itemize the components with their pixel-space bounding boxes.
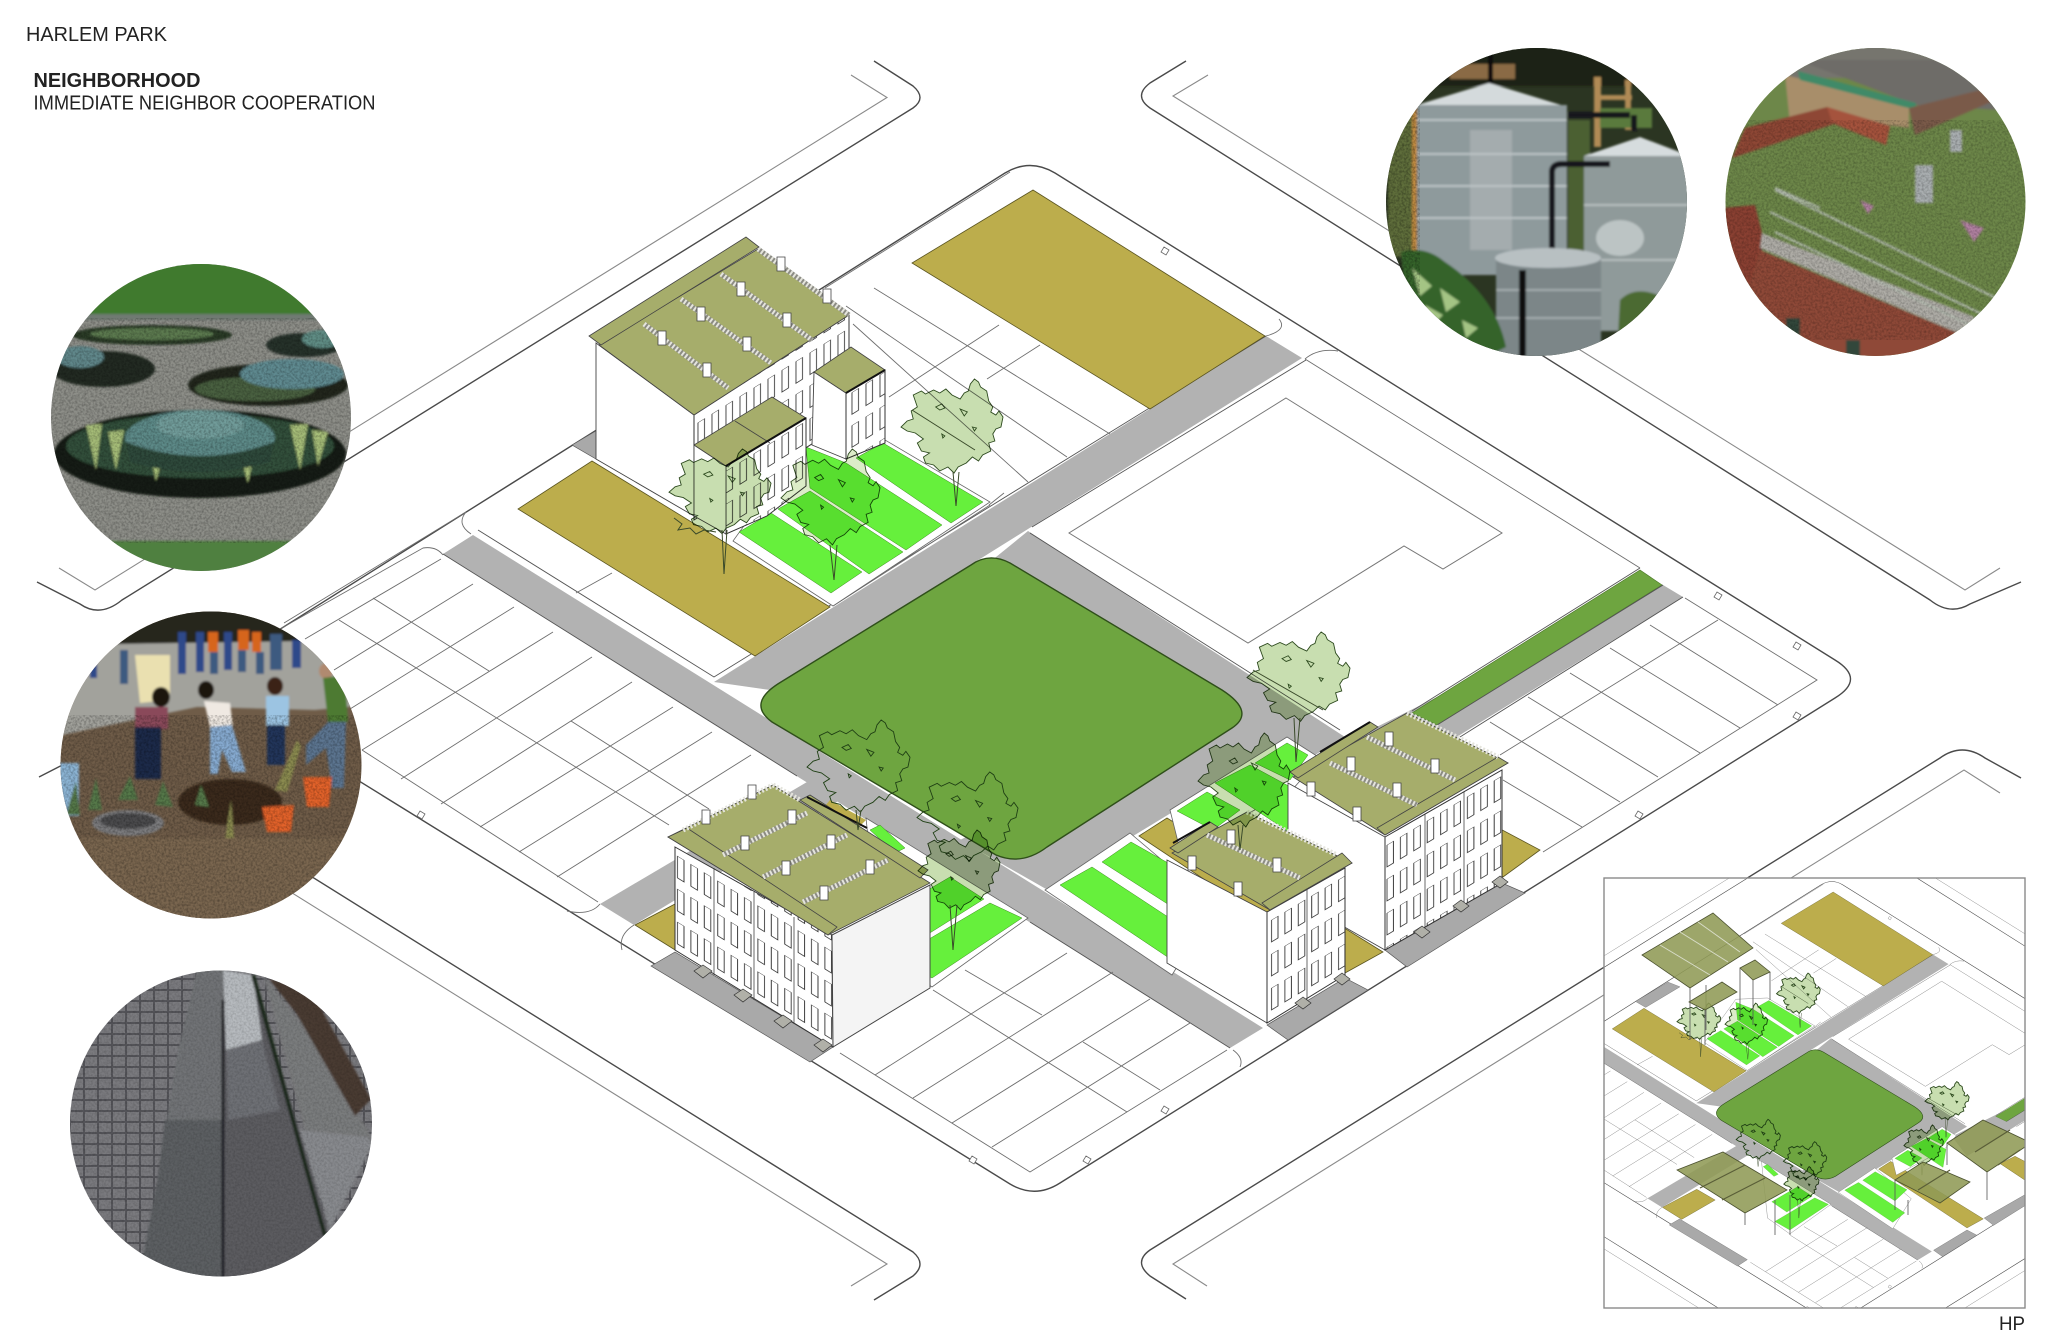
front sidewalks (572, 400, 1525, 1062)
hatched strips (1330, 737, 1455, 805)
stoops (1295, 973, 1350, 1009)
roof front band (1377, 757, 1508, 835)
roof back parapet band (589, 237, 759, 345)
curb notches (417, 247, 1801, 1164)
roof (1293, 713, 1508, 835)
photo: neighbors planting rain garden (55, 605, 367, 928)
street trees (669, 379, 1350, 950)
building: north-west row houses (589, 237, 885, 534)
chimneys (1307, 732, 1439, 821)
building: far right row houses (1288, 713, 1508, 950)
party wall lines (1425, 792, 1464, 927)
roof back band (1290, 722, 1378, 778)
photo: galvanized rain water tanks (1380, 44, 1692, 360)
roof back band (1170, 822, 1218, 853)
rear ell one (726, 418, 806, 534)
tree: south right (917, 772, 1018, 950)
side wall (596, 343, 694, 516)
roof back band (800, 795, 928, 878)
olive lot: band behind far right building (1422, 806, 1540, 877)
hatched strip (1207, 835, 1300, 878)
olive lot: top right (912, 190, 1265, 409)
roof (668, 785, 930, 935)
party wall line (1306, 889, 1308, 1000)
front facade with windows (1267, 868, 1345, 1023)
building: south-west row houses (668, 785, 930, 1052)
chimneys (1188, 830, 1281, 896)
front facade with windows (1385, 770, 1502, 950)
building: lower right row houses (1167, 812, 1352, 1023)
roof front band (668, 828, 837, 935)
inset: axonometric with lifted roofs (1603, 877, 2026, 1309)
stoops (1414, 876, 1508, 938)
bright green garden lawns (739, 443, 1308, 978)
party wall strips (644, 249, 849, 388)
gable wall (832, 885, 930, 1047)
inset: floating roofs and posts (1642, 913, 2025, 1235)
label: inset initials: HP (1999, 1314, 2025, 1335)
hatched strips (723, 813, 888, 902)
front facade with windows (694, 315, 849, 520)
lawn margin: south gardens (866, 818, 1028, 987)
side wall (1288, 783, 1385, 950)
inset: scaled site plan (1604, 878, 2024, 1308)
lawn margin: east gardens (1170, 737, 1320, 850)
back edge dark line (807, 797, 867, 828)
heading: scale of intervention: NEIGHBORHOOD (34, 70, 200, 92)
back edge dark line (1320, 722, 1370, 752)
olive lot: left (518, 461, 830, 656)
tree: north-west right (901, 379, 1003, 506)
party wall lines (714, 868, 794, 1024)
photo: green roof with railing (1720, 44, 2032, 362)
side wall (1167, 860, 1267, 1023)
front facade with windows (675, 847, 833, 1047)
roof (1172, 812, 1352, 910)
title: project name: HARLEM PARK (26, 24, 168, 46)
photo: stone paved water channel (65, 965, 377, 1285)
NE lot: large building footprint outline (1069, 398, 1502, 643)
lot grid lines (280, 172, 1817, 1172)
rear ell two (812, 372, 846, 459)
central park lawn (761, 558, 1242, 859)
road: gray alleys and streets (443, 336, 1683, 1048)
chimneys (658, 257, 831, 377)
chimneys (702, 785, 874, 900)
tree: north-west centre (781, 449, 880, 580)
back edge dark line (1173, 822, 1210, 843)
stoops (694, 965, 832, 1052)
olive lot: lower left (635, 883, 758, 953)
back olive sliver (825, 800, 866, 826)
main roof (599, 249, 849, 415)
road edge lines (443, 336, 1683, 1048)
lawn margin: north-west gardens (733, 437, 990, 606)
photo: rain domes in gravel (45, 260, 357, 575)
roof front band (1262, 853, 1352, 910)
tree: south left (807, 720, 910, 830)
tree: east lower (1198, 733, 1290, 850)
subheading: strategy: IMMEDIATE NEIGHBOR COOPERATION (34, 92, 376, 114)
lawn margin: south-east gardens (1045, 833, 1215, 975)
olive lot: band behind lower right buildings (1139, 818, 1383, 973)
tree: north-west left (669, 449, 771, 574)
tree: east upper (1247, 632, 1350, 762)
